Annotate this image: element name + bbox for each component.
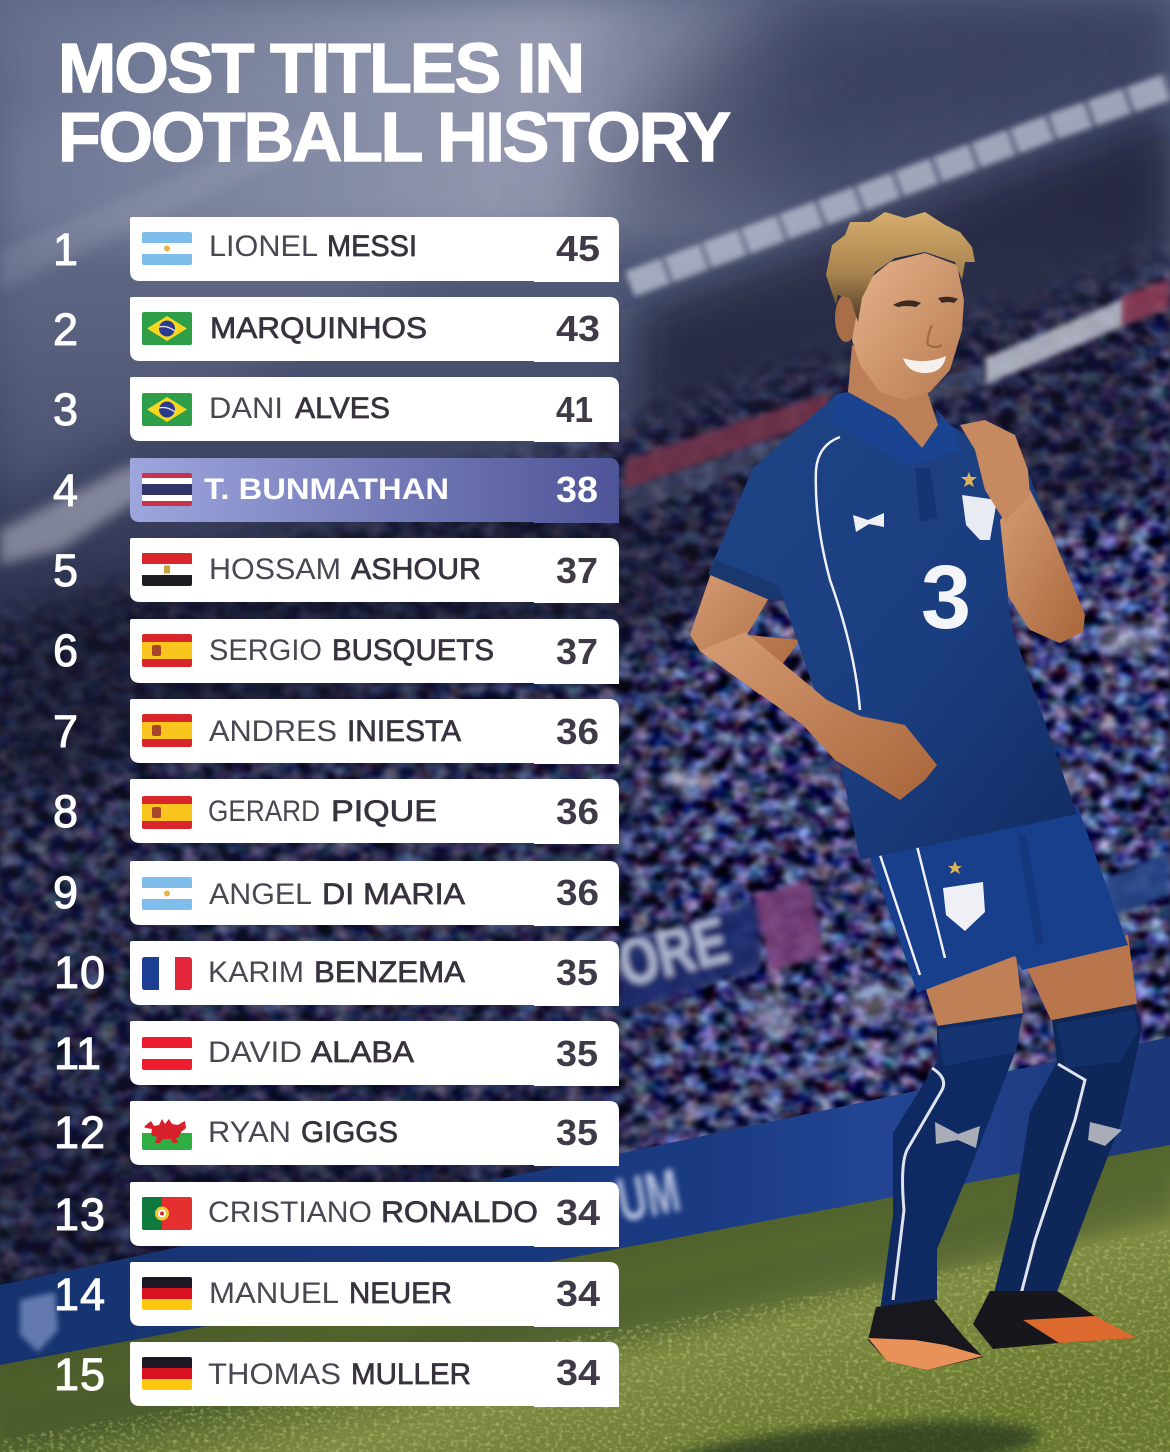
row 11: David Alaba: 11: [54, 1028, 101, 1079]
row 9: Angel Di Maria: 36: [556, 872, 599, 913]
head: face: [852, 253, 964, 400]
row 12: Ryan Giggs: GIGGS: [301, 1116, 398, 1149]
row 13: Cristiano Ronaldo: RONALDO: [381, 1196, 538, 1229]
row 14: Manuel Neuer: 14: [54, 1269, 105, 1320]
row 15: Thomas Muller: MULLER: [351, 1358, 471, 1391]
row 8: Gerard Pique: [53, 779, 619, 844]
shorts star and crest: [948, 861, 962, 874]
row 14: Manuel Neuer: 34: [556, 1273, 600, 1314]
row 8: Gerard Pique: 36: [556, 791, 599, 832]
jersey star and crest: [961, 472, 977, 487]
row 12: Ryan Giggs: 35: [556, 1112, 598, 1153]
row 10: Karim Benzema: 10: [54, 947, 105, 998]
kit logo: [853, 513, 884, 532]
row 13: Cristiano Ronaldo: 34: [556, 1192, 600, 1233]
row 3: Dani Alves: [53, 377, 619, 442]
row 1: Messi: [53, 217, 619, 282]
row 1: Messi: MESSI: [327, 230, 417, 263]
title: MOST TITLES IN: [58, 29, 585, 107]
row 10: Karim Benzema: 35: [556, 952, 598, 993]
crowd: [0, 252, 1170, 1354]
row 4: T. Bunmathan highlighted: [53, 458, 619, 523]
row 1: Messi: LIONEL: [209, 230, 318, 263]
row 14: Manuel Neuer: NEUER: [349, 1277, 452, 1310]
row 6: Sergio Busquets: 6: [53, 625, 78, 676]
jersey piping: [816, 437, 860, 710]
head: hair: [826, 212, 975, 322]
row 12: Ryan Giggs: RYAN: [208, 1116, 291, 1149]
player photo illustration: [690, 212, 1142, 1370]
row 6: Sergio Busquets: SERGIO: [209, 634, 322, 667]
row 7: Andres Iniesta: [53, 699, 619, 764]
row 3: Dani Alves: DANI: [209, 392, 283, 425]
row 7: Andres Iniesta: 36: [556, 711, 599, 752]
row 5: Hossam Ashour: [53, 538, 619, 603]
row 5: Hossam Ashour: 37: [556, 550, 598, 591]
shirt number: 3: [921, 548, 971, 648]
row 3: Dani Alves: ALVES: [295, 392, 390, 425]
boot left: [868, 1299, 983, 1370]
row 6: Sergio Busquets: [53, 619, 619, 684]
row 9: Angel Di Maria: ANGEL: [209, 878, 312, 911]
row 15: Thomas Muller: THOMAS: [208, 1358, 341, 1391]
row 14: Manuel Neuer: [54, 1262, 619, 1327]
row 6: Sergio Busquets: BUSQUETS: [332, 634, 494, 667]
neck: [848, 345, 938, 448]
placket: [915, 468, 938, 522]
row 9: Angel Di Maria: [53, 861, 619, 926]
grass: [0, 1145, 1170, 1452]
sock piping: [893, 1068, 944, 1300]
player: sock far: [993, 1004, 1142, 1297]
stand light strip: [630, 86, 1170, 284]
row 2: Marquinhos: 43: [556, 308, 600, 349]
row 11: David Alaba: [54, 1021, 619, 1086]
row 5: Hossam Ashour: ASHOUR: [351, 553, 481, 586]
row 9: Angel Di Maria: 9: [53, 867, 78, 918]
row 3: Dani Alves: 3: [53, 384, 78, 435]
forearm and hand on hip: [700, 632, 937, 800]
row 13: Cristiano Ronaldo: [54, 1182, 619, 1247]
collar: [830, 392, 960, 465]
row 11: David Alaba: ALABA: [311, 1036, 414, 1069]
row 8: Gerard Pique: GERARD: [208, 795, 320, 828]
row 2: Marquinhos: [53, 297, 619, 362]
hand on chest: [960, 420, 1030, 522]
row 4: T. Bunmathan highlighted: 4: [53, 465, 78, 516]
row 7: Andres Iniesta: ANDRES: [209, 715, 337, 748]
row 13: Cristiano Ronaldo: CRISTIANO: [208, 1196, 372, 1229]
row 5: Hossam Ashour: HOSSAM: [209, 553, 341, 586]
spectators in white: [666, 624, 1164, 1039]
row 8: Gerard Pique: PIQUE: [331, 795, 437, 828]
advertising board: [0, 1037, 1170, 1365]
row 13: Cristiano Ronaldo: 13: [54, 1189, 105, 1240]
row 4: T. Bunmathan highlighted: 38: [556, 469, 598, 510]
forearm raised: [1000, 490, 1085, 643]
player: sock near: [880, 1013, 1023, 1311]
row 12: Ryan Giggs: [54, 1101, 619, 1166]
title: FOOTBALL HISTORY: [58, 98, 731, 176]
row 6: Sergio Busquets: 37: [556, 631, 598, 672]
title: [58, 29, 731, 176]
stand banners: [985, 298, 1125, 385]
row 2: Marquinhos: 2: [53, 304, 78, 355]
shorts: [867, 805, 1128, 993]
head: ear: [835, 294, 857, 342]
row 9: Angel Di Maria: DI MARIA: [322, 878, 465, 911]
row 15: Thomas Muller: 34: [556, 1352, 600, 1393]
row 7: Andres Iniesta: INIESTA: [347, 715, 461, 748]
row 7: Andres Iniesta: 7: [53, 706, 78, 757]
row 11: David Alaba: 35: [556, 1033, 598, 1074]
row 11: David Alaba: DAVID: [208, 1036, 302, 1069]
row 14: Manuel Neuer: MANUEL: [209, 1277, 339, 1310]
row 15: Thomas Muller: [54, 1342, 619, 1407]
row 10: Karim Benzema: KARIM: [208, 956, 304, 989]
lower stand banner: ORE: [610, 902, 735, 1001]
row 15: Thomas Muller: 15: [54, 1349, 105, 1400]
row 10: Karim Benzema: BENZEMA: [314, 956, 465, 989]
lower stand banner: [610, 850, 1170, 1012]
head: eyes, nose and smile: [893, 297, 958, 307]
player: near thigh: [923, 946, 1023, 1026]
row 4: T. Bunmathan highlighted: T. BUNMATHAN: [204, 473, 449, 506]
row 1: Messi: 1: [53, 224, 78, 275]
sock logos: [935, 1122, 980, 1148]
row 5: Hossam Ashour: 5: [53, 545, 78, 596]
railing: [620, 955, 1170, 1140]
row 3: Dani Alves: 41: [556, 389, 593, 430]
boot right: [973, 1291, 1137, 1349]
row 2: Marquinhos: MARQUINHOS: [210, 312, 427, 345]
row 12: Ryan Giggs: 12: [54, 1107, 105, 1158]
jersey: [708, 394, 1077, 860]
row 1: Messi: 45: [556, 228, 600, 269]
background: stadium: UM: [612, 1156, 686, 1236]
row 8: Gerard Pique: 8: [53, 786, 78, 837]
row 10: Karim Benzema: [54, 941, 619, 1006]
upper arm: [690, 570, 800, 695]
player: far leg thigh: [1023, 935, 1137, 1022]
